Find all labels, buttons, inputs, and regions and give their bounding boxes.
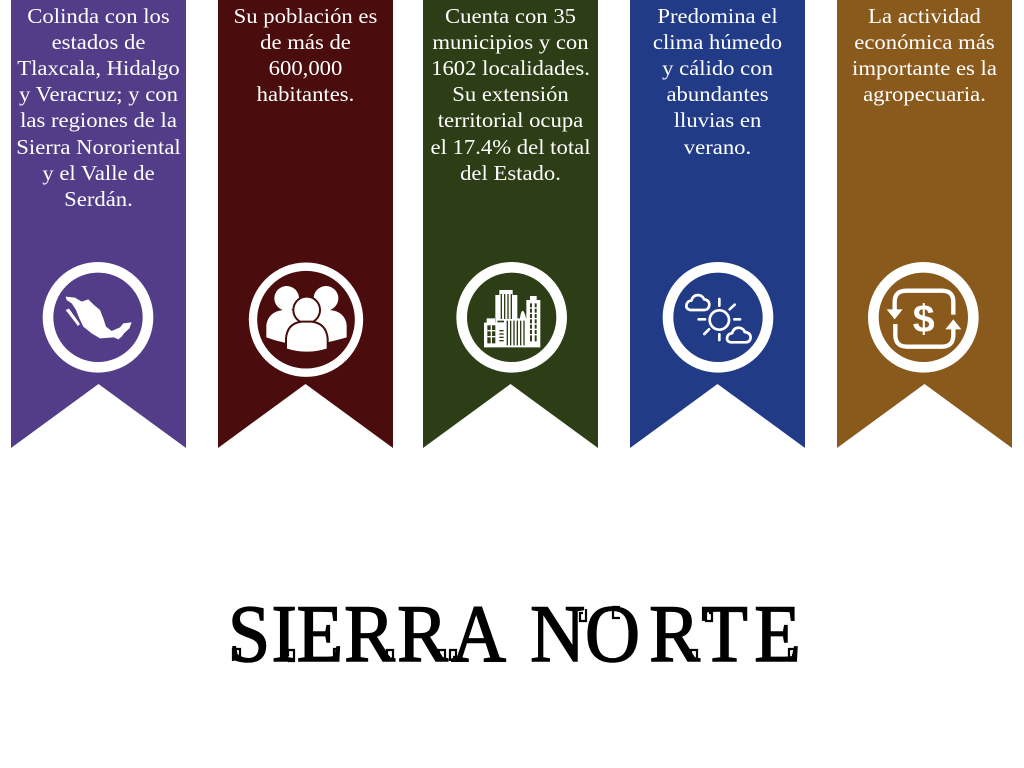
text: municipios [431,4,590,185]
text: colindancias: Sierra Nororiental [16,135,181,159]
ribbon: maroon [218,0,393,448]
text: clima: Predomina el [657,4,778,28]
text: actividad económica: importante es la [852,56,997,80]
text: población: habitantes. [257,82,354,106]
panel: actividad económica [837,0,1012,448]
panel: población [218,0,393,448]
text: clima: y cálido con [662,56,773,80]
icon: group of people [248,262,364,377]
ribbon: green [423,0,598,448]
text: población: 600,000 [269,56,342,80]
icon: money cycle [868,262,979,373]
ribbon: brown [837,0,1012,448]
text: población: de más de [260,30,351,54]
text: municipios: 1602 localidades. [431,56,590,80]
panel: colindancias [11,0,186,448]
text: colindancias: Colinda con los [27,4,170,28]
text: colindancias: las regiones de la [20,108,177,132]
icon: sun and clouds [662,262,774,373]
text: colindancias: y el Valle de [42,161,155,185]
text: colindancias: estados de [52,30,145,54]
text: municipios: municipios y con [432,30,589,54]
text: población: Su población es [234,4,377,28]
ribbon: purple [11,0,186,448]
text: actividad económica: La actividad [868,4,981,28]
text: actividad económica: agropecuaria. [863,82,986,106]
text: clima [653,4,782,159]
text: clima: lluvias en [674,108,761,132]
text: municipios: Cuenta con 35 [445,4,576,28]
text: colindancias: Serdán. [64,187,133,211]
text: actividad económica: económica más [854,30,995,54]
text: colindancias [16,4,181,211]
text: clima: clima húmedo [653,30,782,54]
icon: money cycle: $ [913,297,935,341]
text: clima: verano. [684,135,751,159]
icon: map of Mexico [42,262,154,373]
text: colindancias: y Veracruz; y con [19,82,178,106]
text: población [234,4,377,106]
ribbon: blue [630,0,805,448]
text: clima: abundantes [666,82,769,106]
text: actividad económica [852,4,997,106]
text: municipios: del Estado. [460,161,561,185]
text: municipios: Su extensión [452,82,569,106]
panel: municipios [423,0,598,448]
text: municipios: territorial ocupa [438,108,583,132]
title: SIERRA NORTE [228,589,801,680]
text: colindancias: Tlaxcala, Hidalgo [17,56,180,80]
panel: clima [630,0,805,448]
text: municipios: el 17.4% del total [431,135,590,159]
icon: city buildings [456,262,567,373]
